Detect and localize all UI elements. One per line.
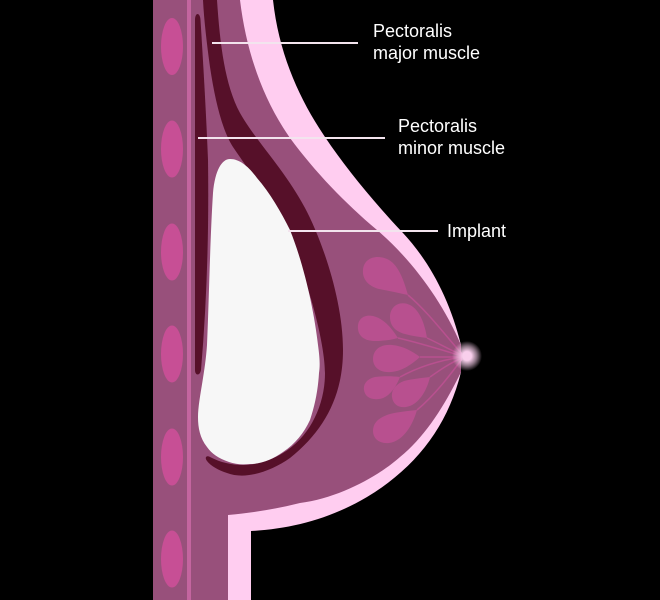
leader line: pectoralis minor <box>198 137 385 139</box>
vertical chest wall line <box>187 0 191 600</box>
breast tissue <box>153 0 461 600</box>
pectoralis major muscle <box>203 0 343 476</box>
mammary lobules <box>358 257 430 443</box>
pectoralis minor muscle <box>195 14 208 374</box>
leader line: implant <box>288 230 438 232</box>
label: pectoralis major muscle: Pectoralis <box>373 21 452 41</box>
label: pectoralis minor muscle: minor muscle <box>398 138 505 158</box>
milk ducts <box>398 295 462 410</box>
implant <box>198 159 320 464</box>
label: implant: Implant <box>447 221 506 241</box>
label: pectoralis major muscle: major muscle <box>373 43 480 63</box>
leader line: pectoralis major <box>212 42 358 44</box>
label: pectoralis minor muscle: Pectoralis <box>398 116 477 136</box>
rib ellipses <box>161 18 183 588</box>
nipple glow <box>452 341 482 371</box>
skin outer layer <box>228 0 461 600</box>
